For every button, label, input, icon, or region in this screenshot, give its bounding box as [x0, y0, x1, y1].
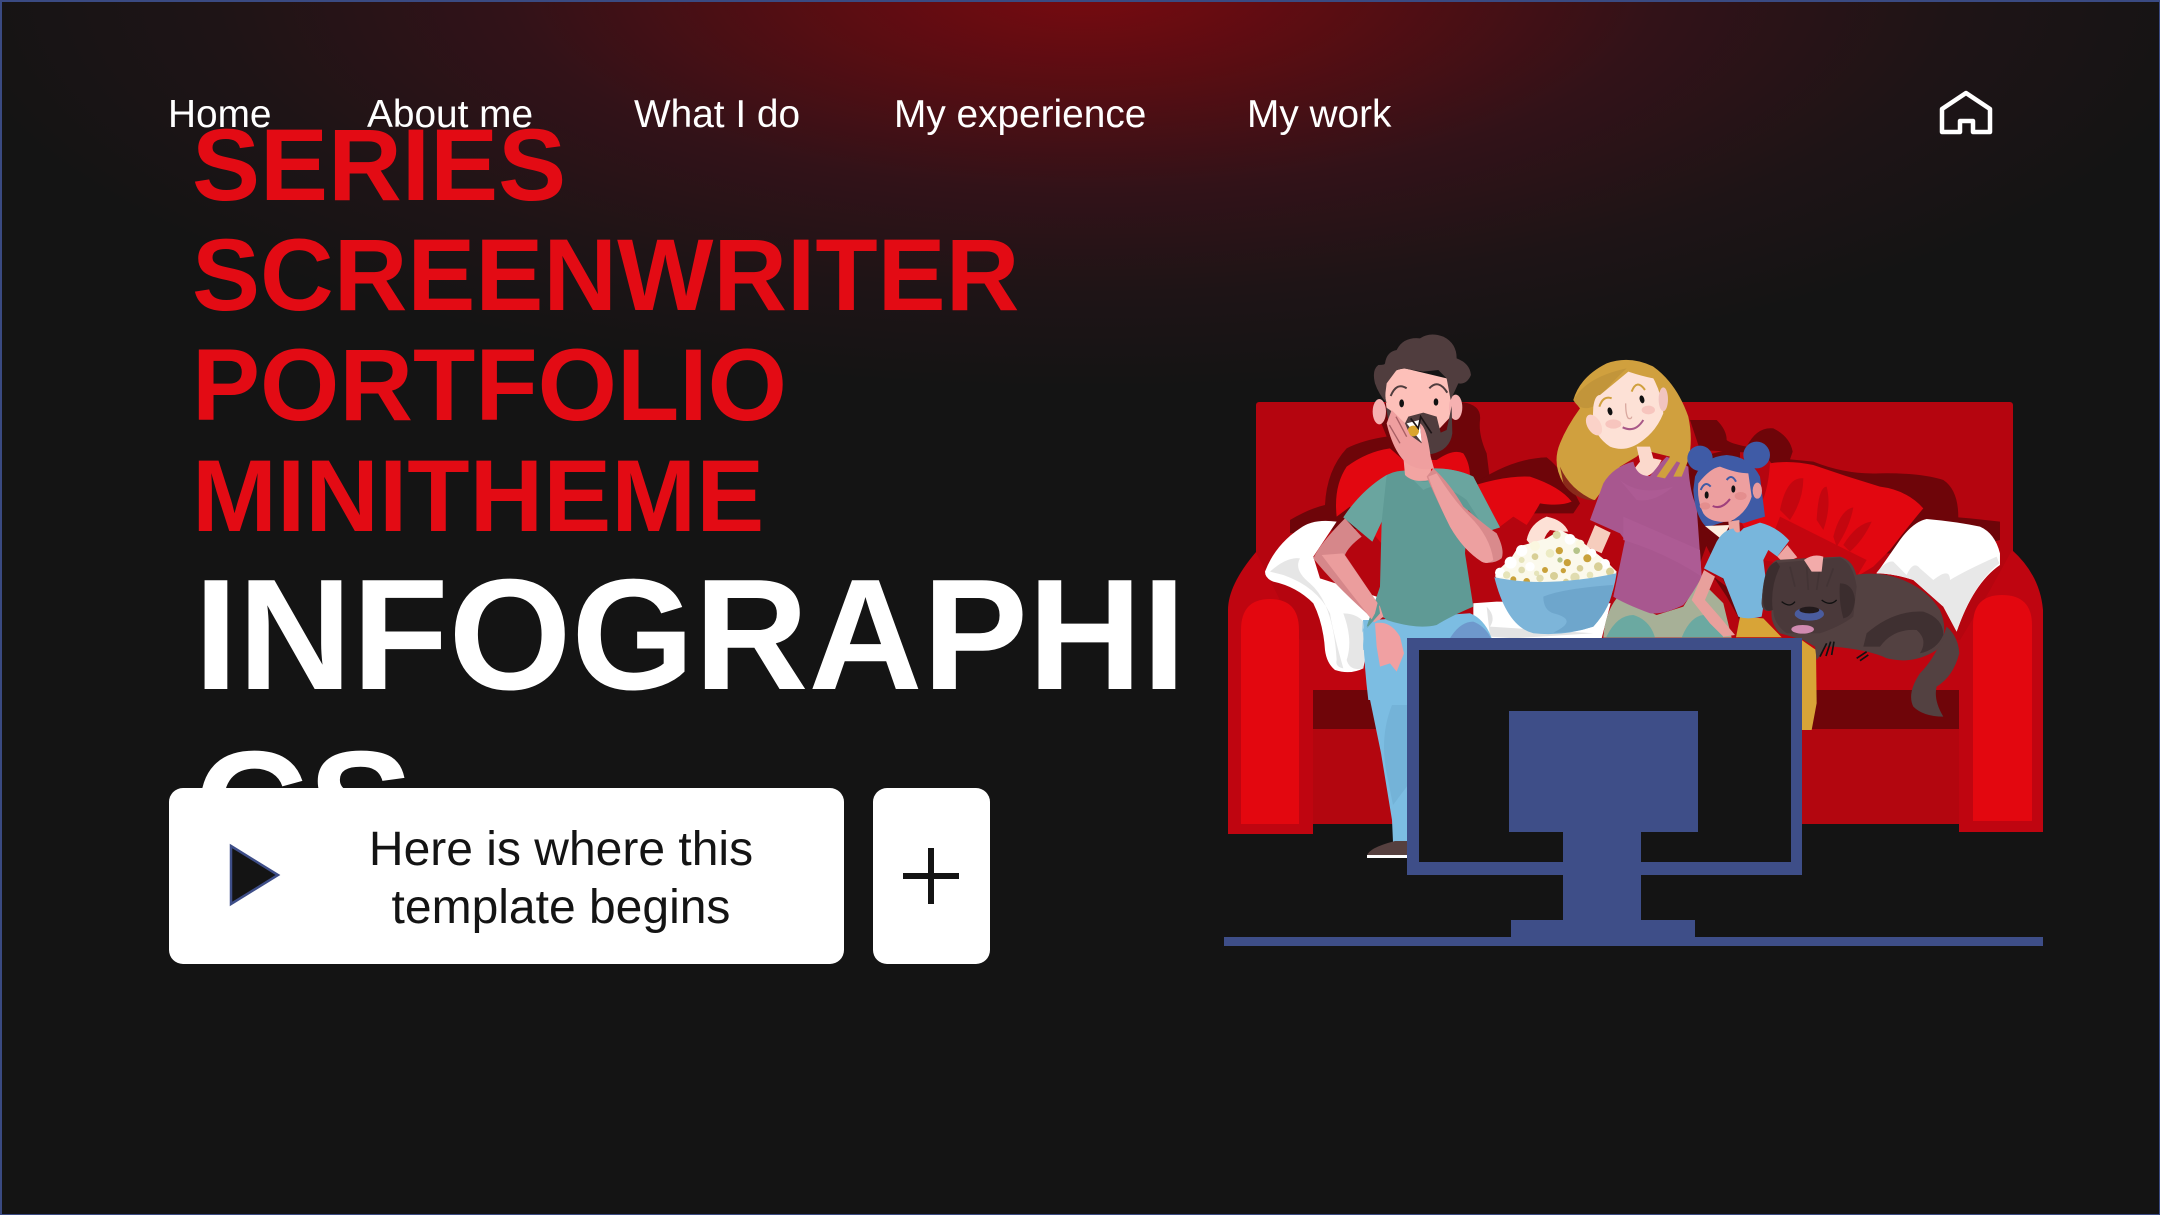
button text — [369, 823, 753, 934]
person: girl with blue hair — [1687, 442, 1817, 730]
navigation bar — [168, 93, 1392, 136]
person: man eating popcorn — [1313, 335, 1503, 858]
icon: home outline — [1940, 90, 1992, 134]
navigation bar: What I do — [634, 93, 800, 136]
sofa — [1228, 402, 2043, 834]
navigation bar: My experience — [894, 93, 1146, 136]
dog asleep on the sofa — [1762, 556, 1959, 717]
title: white heading cut off by the button: INFOGRAPHI — [194, 547, 1186, 723]
button text: Here is where this — [369, 823, 753, 876]
title: white heading cut off by the button — [194, 547, 1186, 895]
title: red heading: PORTFOLIO — [192, 328, 787, 442]
title: white heading cut off by the button: CS — [194, 719, 414, 895]
title: red heading: SCREENWRITER — [192, 218, 1019, 332]
icon: play triangle — [230, 844, 280, 906]
title: red heading: MINITHEME — [192, 439, 764, 553]
navigation bar: My work — [1247, 93, 1391, 136]
title: red heading: SERIES — [192, 108, 566, 222]
navigation bar: Home — [168, 93, 272, 136]
button: start template — [169, 788, 844, 964]
icon: plus sign — [903, 848, 959, 904]
navigation bar: About me — [367, 93, 533, 136]
button text: template begins — [392, 880, 730, 934]
button: plus — [873, 788, 990, 964]
popcorn bowl — [1494, 530, 1617, 634]
person: woman reaching into popcorn bowl — [1494, 360, 1732, 638]
title: red heading — [192, 108, 1019, 553]
